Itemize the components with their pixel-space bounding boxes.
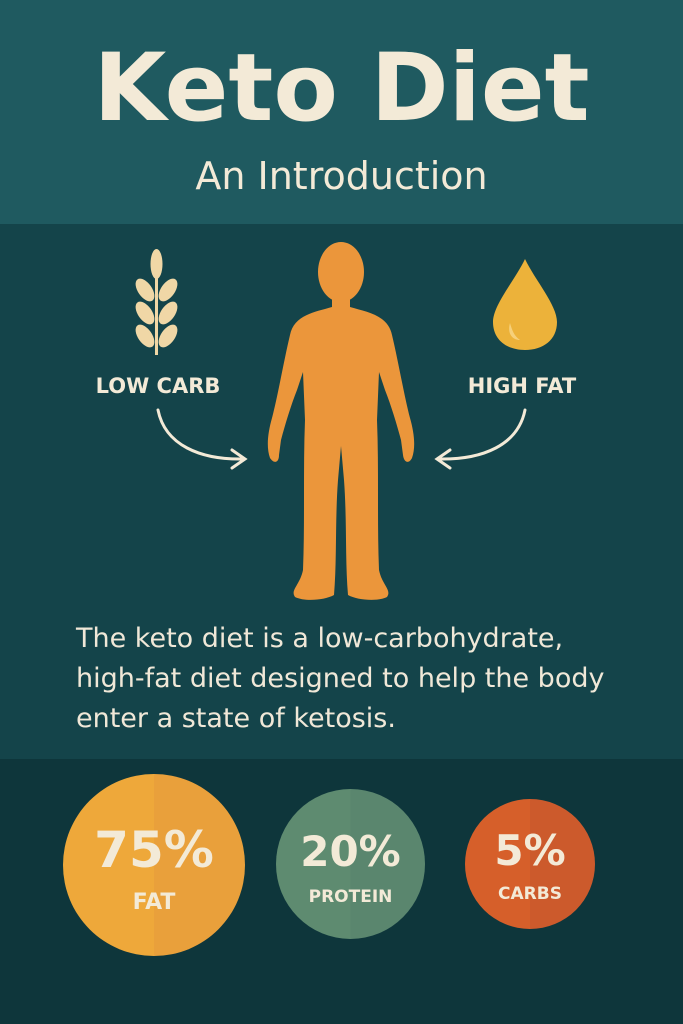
arrow: left xyxy=(158,410,245,468)
header band xyxy=(0,0,683,224)
circle: fat: FAT xyxy=(133,890,175,915)
icon: oil drop xyxy=(493,259,557,350)
description text xyxy=(76,623,604,734)
diagram xyxy=(96,242,577,600)
label: low carb: LOW CARB xyxy=(96,374,220,398)
arrow: right xyxy=(437,410,525,468)
circle: carbs: 5% xyxy=(494,826,566,875)
bottom panel: macros xyxy=(0,759,683,1024)
label: high fat: HIGH FAT xyxy=(468,374,577,398)
circle: protein: 20% xyxy=(300,827,401,876)
icon: wheat xyxy=(132,249,181,355)
circle: fat xyxy=(63,774,245,956)
circle: protein xyxy=(276,789,425,939)
description text: The keto diet is a low-carbohydrate, xyxy=(76,623,563,654)
description text: enter a state of ketosis. xyxy=(76,703,396,734)
human figure xyxy=(268,242,414,600)
circle: fat: 75% xyxy=(94,821,214,879)
description text: high-fat diet designed to help the body xyxy=(76,663,604,694)
circle: carbs xyxy=(465,799,595,929)
middle panel xyxy=(0,224,683,759)
title: Keto Diet xyxy=(93,34,590,143)
circle: protein: PROTEIN xyxy=(309,887,392,907)
circle: carbs: CARBS xyxy=(498,884,562,904)
subtitle: An Introduction xyxy=(195,154,488,198)
